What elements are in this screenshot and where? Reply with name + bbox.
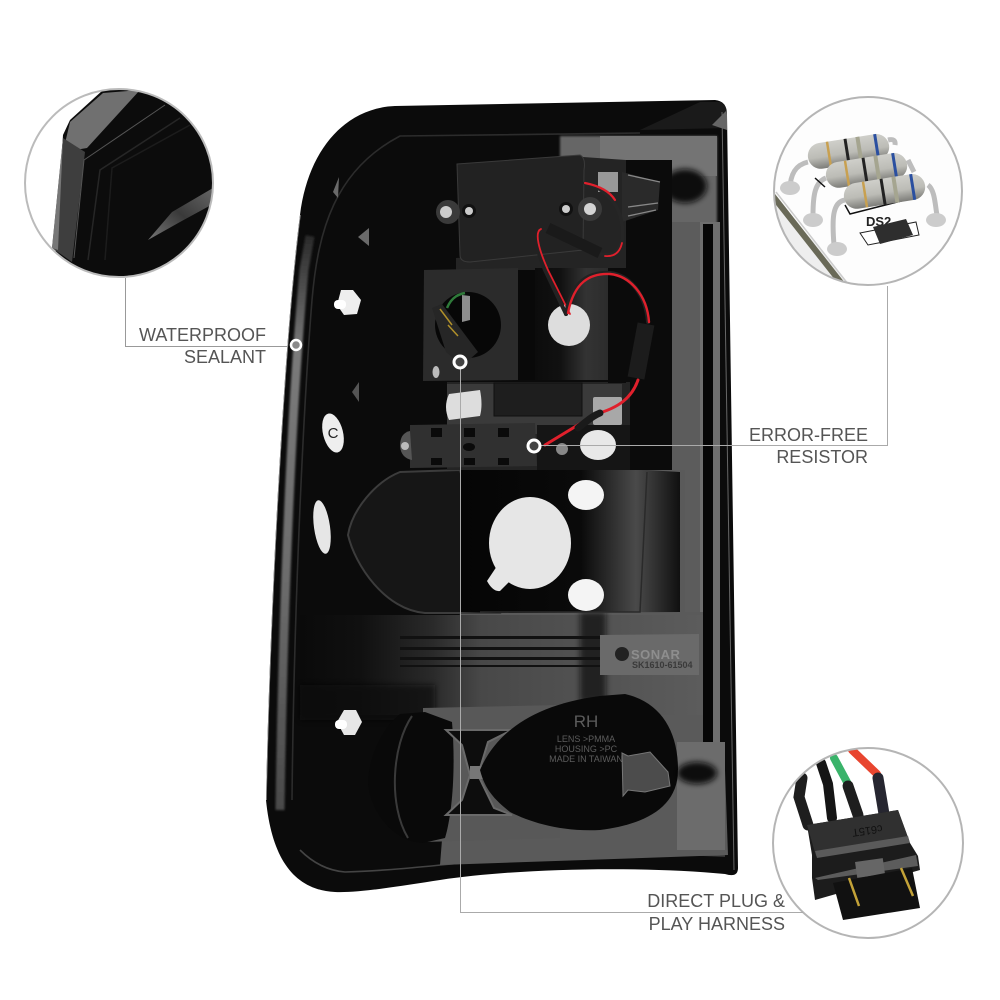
callout: waterproof sealant [20,85,301,367]
stud nut lower [335,710,362,735]
marker dot [291,340,301,350]
callout: error-free resistor: RESISTOR [776,447,868,467]
marker dot [454,356,466,368]
callout: direct plug and play harness [454,356,970,945]
callout: waterproof sealant: SEALANT [184,347,266,367]
left lens [368,712,454,843]
leader line [460,368,803,912]
plug body [807,810,920,900]
white peg top [568,480,604,510]
leader line [540,286,888,446]
upper module background [447,157,630,470]
inline connector [548,228,600,253]
DS2 chip [860,214,919,245]
white peg bottom [568,579,604,611]
label text: DIRECT PLUG & [647,891,785,911]
resistor 1 [808,134,890,169]
lower right dark area [537,425,630,470]
right column [672,222,702,622]
resistor 2 [826,152,908,188]
lens moulded text: RH [574,712,598,731]
marker triangles [333,177,369,402]
zoom circle: plug: c615T [851,822,883,838]
big white disc [487,497,571,591]
lower right grey panel [440,612,728,865]
lens moulded text: LENS >PMMA [557,734,615,744]
plug tip [833,868,920,920]
harness connector [636,324,646,378]
right lens [480,694,678,830]
stud nut upper [334,290,361,315]
SONAR label: SONAR [631,647,681,662]
left socket block [423,268,518,381]
top rim highlight [640,102,727,130]
left bezel sealant strip [280,236,310,810]
leader line [126,278,288,346]
resistor legs [790,140,937,245]
label text: ERROR-FREE [749,425,868,445]
wire: module to disc [536,229,566,314]
white oval C: C [328,425,339,442]
bulb connector [432,304,478,366]
lens moulded text: HOUSING >PC [555,744,618,754]
SONAR label [600,634,699,675]
wire: connector to resistor [545,380,638,445]
lens moulded text: MADE IN TAIWAN [549,754,623,764]
grey bridge panel [423,705,560,842]
right socket block [518,268,626,383]
white oval C [318,411,348,455]
reflector left oval [348,470,500,613]
socket hole [435,292,501,358]
callout: error-free resistor [528,90,970,467]
lower module row [400,383,630,470]
zoom circle: sealant detail [24,88,214,278]
bulb knob [622,752,670,796]
SONAR label: SK1610-61504 [632,660,693,670]
rectangular block [494,383,582,416]
white peg right [580,430,616,460]
callout: direct plug and play harness: PLAY HARNESS [649,914,785,934]
white oval label [310,499,334,555]
lower reflector [348,470,680,613]
module cover [457,155,584,262]
grey square [593,397,622,425]
wires [799,750,884,825]
wiring [536,183,649,445]
wire: top clip [585,183,623,255]
white disc [548,304,590,346]
top right clip [598,172,618,192]
housing body [266,100,738,892]
lower lens assembly [368,694,717,843]
cross bridge [446,730,512,815]
reflector block [460,470,680,613]
resistor 3 [844,174,926,209]
zoom circle: plug [770,745,970,945]
knob shadow [677,762,717,784]
label text: WATERPROOF [139,325,266,345]
DS2 chip: DS2 [866,214,891,229]
top right grey panel [558,134,718,222]
circuit module [436,155,660,262]
screw tabs [436,200,460,224]
lens moulded text [549,712,623,764]
marker dot [528,440,540,452]
connector bar [410,423,537,468]
ribs band [370,615,578,708]
wire: disc to connector [566,273,648,322]
zoom circle: resistors [770,90,970,290]
white peg [446,390,482,420]
